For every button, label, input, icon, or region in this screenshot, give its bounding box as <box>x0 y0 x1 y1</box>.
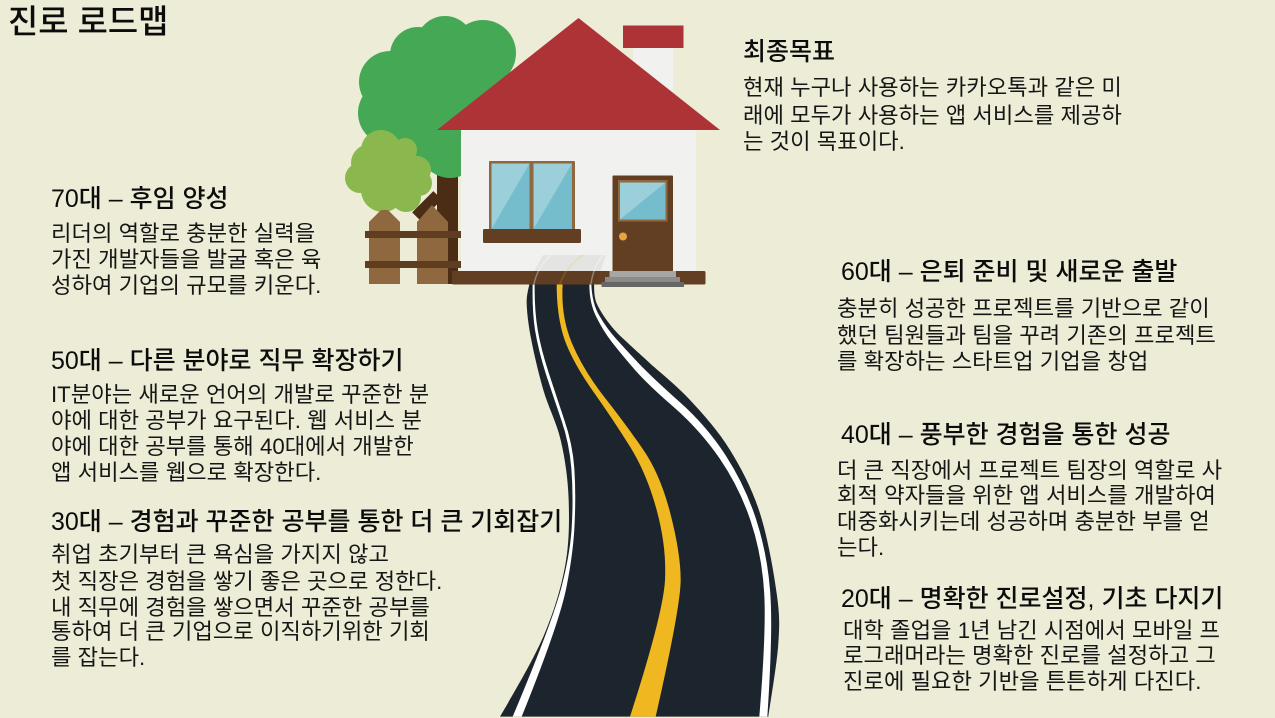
text block: 40s: 더 큰 직장에서 프로젝트 팀장의 역할로 사 <box>837 458 1222 483</box>
text block: 20s <box>841 585 1223 694</box>
text block: 20s: 대학 졸업을 1년 남긴 시점에서 모바일 프 <box>843 618 1220 643</box>
text block: 30s: 를 잡는다. <box>51 645 145 670</box>
text block: final goal: 최종목표 <box>743 38 835 66</box>
house wall <box>461 130 696 272</box>
text block: 30s: 첫 직장은 경험을 쌓기 좋은 곳으로 정한다. <box>51 569 442 594</box>
text block: 60s <box>837 258 1216 374</box>
text block: 50s: IT분야는 새로운 언어의 개발로 꾸준한 분 <box>51 382 429 407</box>
text block: 70s: 가진 개발자들을 발굴 혹은 육 <box>51 247 321 272</box>
text block: 30s: 취업 초기부터 큰 욕심을 가지지 않고 <box>51 542 389 567</box>
bush <box>345 130 432 212</box>
text block: final goal: 현재 누구나 사용하는 카카오톡과 같은 미 <box>743 75 1122 100</box>
text block: 70s: 리더의 역할로 충분한 실력을 <box>51 221 315 246</box>
right road line <box>589 284 771 717</box>
left road line <box>513 284 575 717</box>
door <box>612 176 673 272</box>
text block: 40s: 대중화시키는데 성공하며 충분한 부를 얻 <box>837 509 1210 534</box>
text block: 50s: 야에 대한 공부를 통해 40대에서 개발한 <box>51 434 414 459</box>
text block: 50s: 앱 서비스를 웹으로 확장한다. <box>51 460 321 485</box>
text block: 20s: 로그래머라는 명확한 진로를 설정하고 그 <box>843 643 1216 668</box>
floor <box>452 271 706 284</box>
road <box>500 284 779 717</box>
text block: 40s: 는다. <box>837 535 884 560</box>
text block: 30s <box>51 508 562 670</box>
text block: final goal <box>743 38 1122 154</box>
text block: 20s: 20대 – 명확한 진로설정, 기초 다지기 <box>841 585 1223 613</box>
text block: 40s: 40대 – 풍부한 경험을 통한 성공 <box>841 421 1170 449</box>
text block: 70s <box>51 185 321 298</box>
text block: 70s: 성하여 기업의 규모를 키운다. <box>51 273 321 298</box>
text block: 50s <box>51 347 429 485</box>
roof <box>437 18 720 130</box>
text block: 30s: 내 직무에 경험을 쌓으면서 꾸준한 공부를 <box>51 595 430 620</box>
text block: 40s <box>837 421 1222 560</box>
text block: 50s: 50대 – 다른 분야로 직무 확장하기 <box>51 347 403 375</box>
faded road over the house <box>527 255 606 284</box>
text block: 30s: 30대 – 경험과 꾸준한 공부를 통한 더 큰 기회잡기 <box>51 508 562 536</box>
text block: final goal: 래에 모두가 사용하는 앱 서비스를 제공하 <box>743 103 1122 128</box>
text block: 30s: 통하여 더 큰 기업으로 이직하기위한 기회 <box>51 619 430 644</box>
road surface <box>500 284 779 717</box>
tree crown <box>358 16 516 178</box>
window <box>483 161 581 243</box>
title: 진로 로드맵 <box>8 3 168 40</box>
tree trunk <box>412 165 458 284</box>
text block: 60s: 충분히 성공한 프로젝트를 기반으로 같이 <box>837 296 1210 321</box>
chimney <box>623 26 684 106</box>
text block: 50s: 야에 대한 공부가 요구된다. 웹 서비스 분 <box>51 408 422 433</box>
text block: 60s: 60대 – 은퇴 준비 및 새로운 출발 <box>841 258 1177 286</box>
text block: final goal: 는 것이 목표이다. <box>743 129 905 154</box>
text block: 60s: 를 확장하는 스타트업 기업을 창업 <box>837 349 1148 374</box>
text block: 40s: 회적 약자들을 위한 앱 서비스를 개발하여 <box>837 483 1216 508</box>
centre road line <box>557 284 681 717</box>
front steps <box>602 271 684 287</box>
fence <box>365 205 461 284</box>
text block: 60s: 했던 팀원들과 팀을 꾸려 기존의 프로젝트 <box>837 323 1216 348</box>
text block: 70s: 70대 – 후임 양성 <box>51 185 229 213</box>
text block: 20s: 진로에 필요한 기반을 튼튼하게 다진다. <box>843 669 1201 694</box>
